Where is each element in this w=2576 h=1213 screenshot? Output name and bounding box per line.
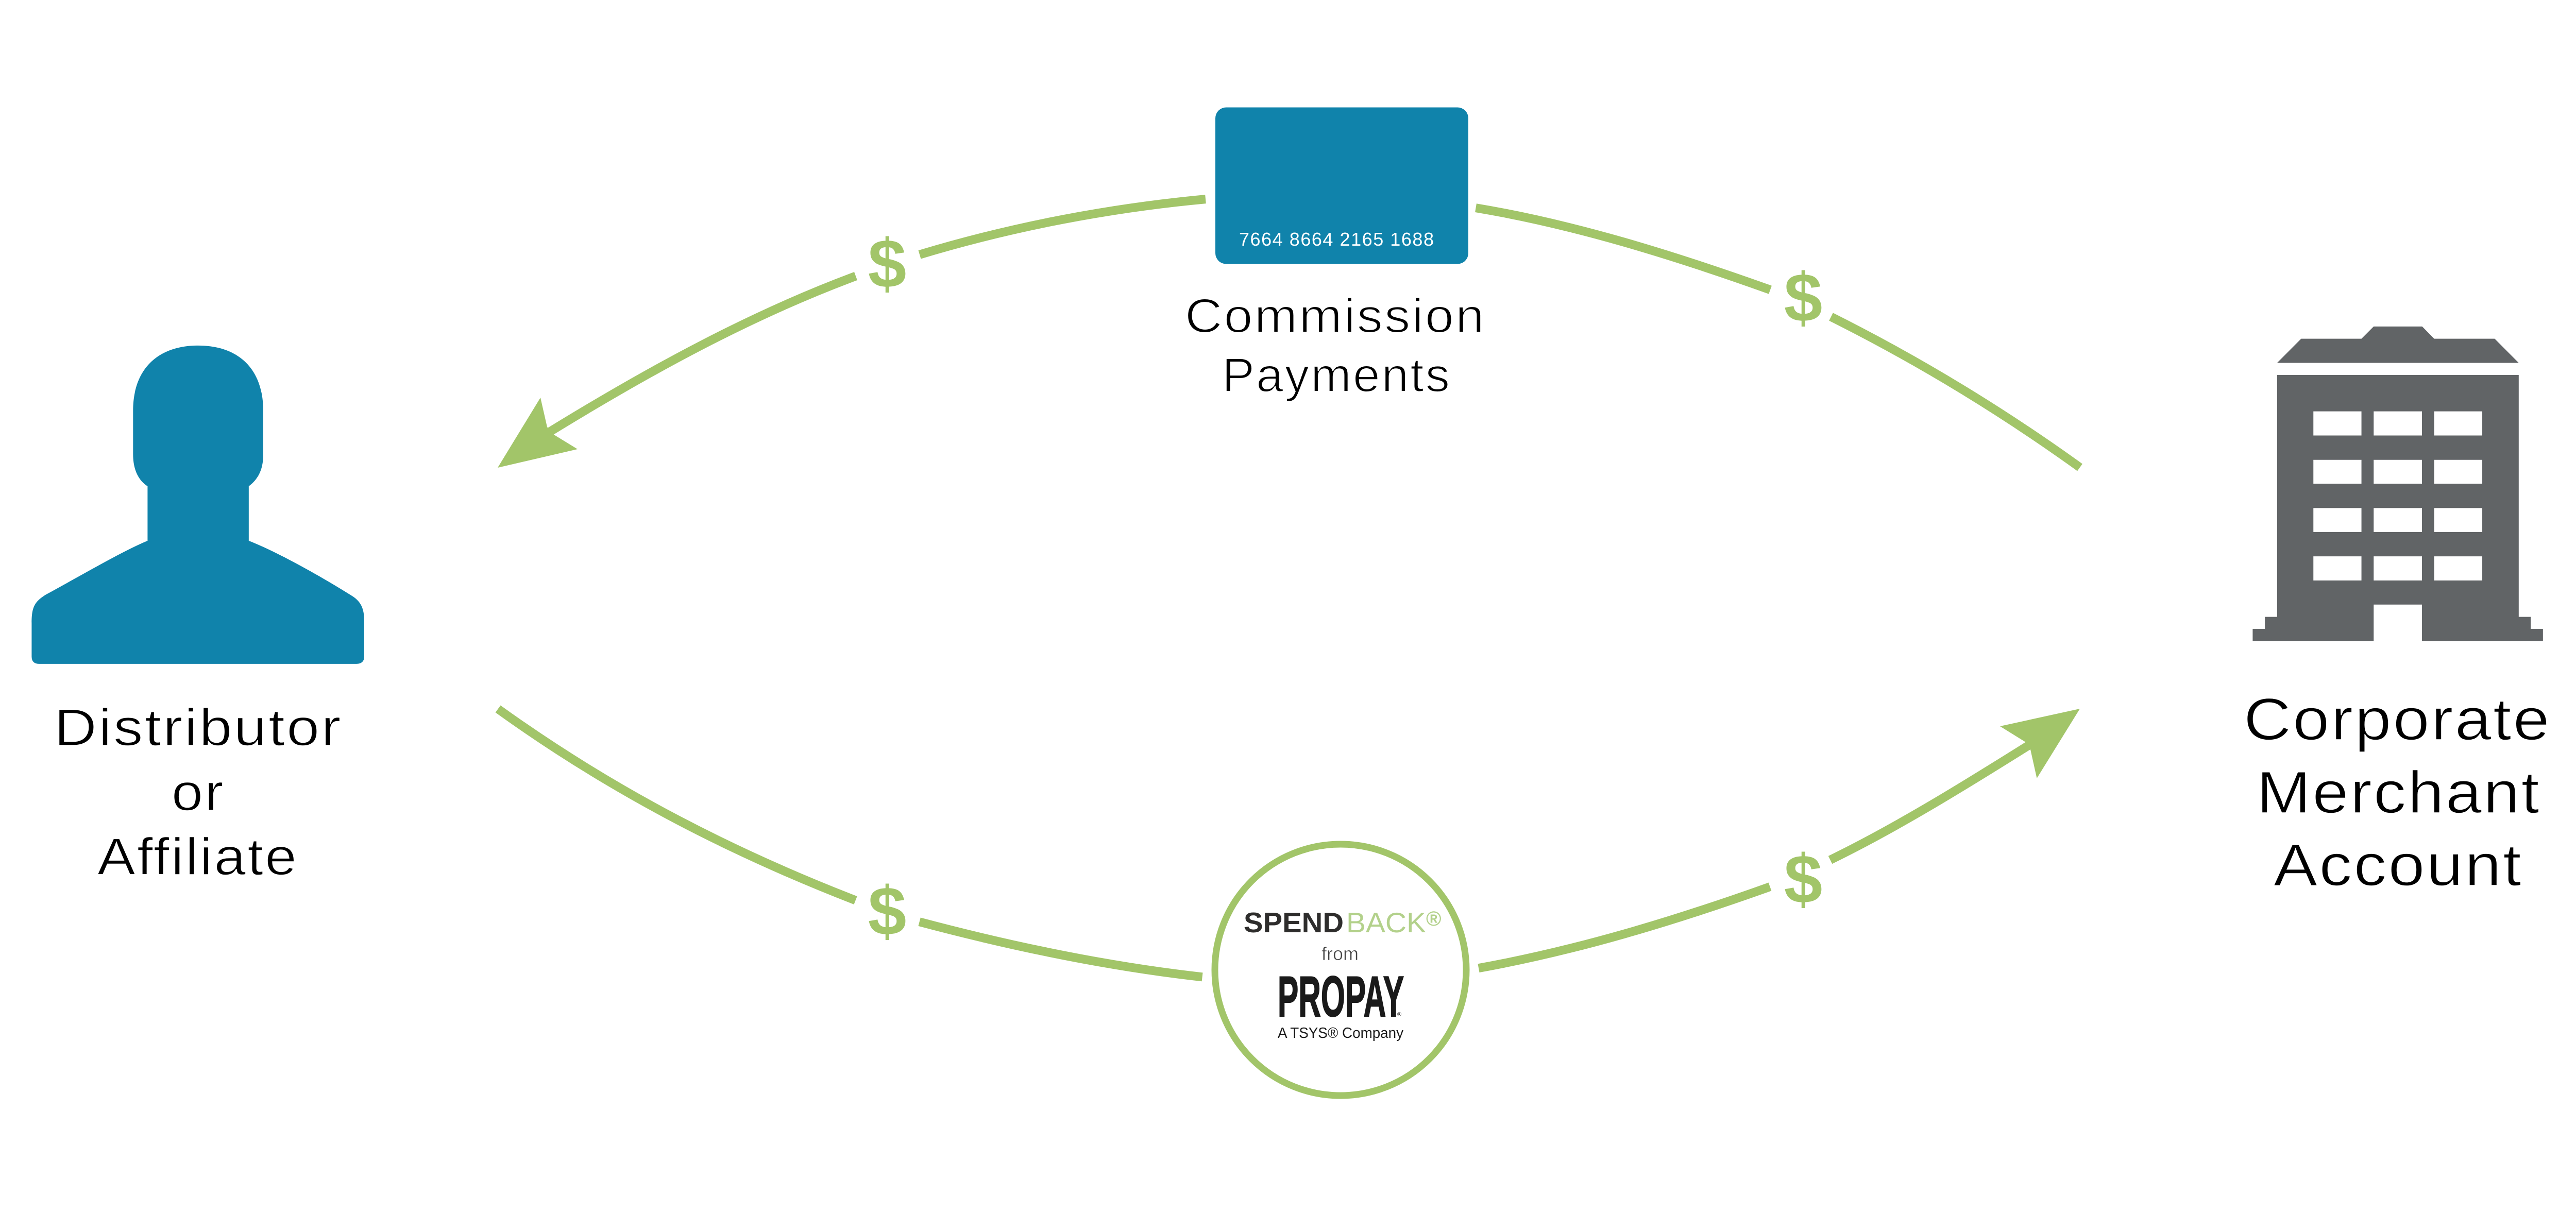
arrow: distributor to Spendback, second segment xyxy=(920,922,1202,977)
dollar sign: bottom left: $ xyxy=(868,873,906,950)
dollar sign: top right: $ xyxy=(1784,260,1822,336)
label: Commission Payments: Payments xyxy=(1222,348,1451,402)
icon: credit card xyxy=(1215,107,1468,264)
arrow: merchant to credit card, second segment xyxy=(1831,317,2080,468)
text: A TSYS Company: A TSYS® Company xyxy=(1278,1025,1403,1041)
badge: Spendback from ProPay xyxy=(1215,844,1466,1096)
label: Corporate Merchant Account: Merchant xyxy=(2257,760,2541,826)
badge: Spendback from ProPay: ® xyxy=(1426,908,1441,930)
arrow: credit card to distributor, first segment xyxy=(920,199,1206,254)
badge: Spendback from ProPay: ® xyxy=(1397,1012,1401,1018)
arrow: distributor to Spendback, first segment xyxy=(498,709,856,900)
arrow: merchant to credit card, first segment xyxy=(1476,208,1770,290)
label: Corporate Merchant Account: Corporate xyxy=(2244,687,2551,753)
logo: Spendback: SPEND xyxy=(1244,907,1344,938)
label: Corporate Merchant Account xyxy=(2244,687,2551,898)
arrow: credit card to distributor, second segment with head xyxy=(498,276,856,468)
label: Distributor or Affiliate: Distributor xyxy=(54,699,343,757)
text: from: from xyxy=(1321,943,1359,964)
icon: office building xyxy=(2252,327,2543,641)
label: Corporate Merchant Account: Account xyxy=(2274,832,2523,898)
label: Commission Payments xyxy=(1185,289,1486,402)
label: Distributor or Affiliate xyxy=(54,699,343,886)
arrow: Spendback to merchant, first segment xyxy=(1479,887,1770,968)
icon: person silhouette xyxy=(31,346,364,664)
logo: ProPay: PROPAY xyxy=(1278,965,1404,1029)
dollar sign: bottom right: $ xyxy=(1784,841,1822,918)
card number: 7664 8664 2165 1688 xyxy=(1239,229,1434,250)
label: Distributor or Affiliate: or xyxy=(172,764,225,822)
label: Distributor or Affiliate: Affiliate xyxy=(97,828,298,886)
label: Commission Payments: Commission xyxy=(1185,289,1486,343)
badge: Spendback from ProPay: BACK xyxy=(1346,907,1426,938)
arrow: Spendback to merchant, second segment with head xyxy=(1830,709,2080,860)
dollar sign: top left: $ xyxy=(868,226,906,302)
